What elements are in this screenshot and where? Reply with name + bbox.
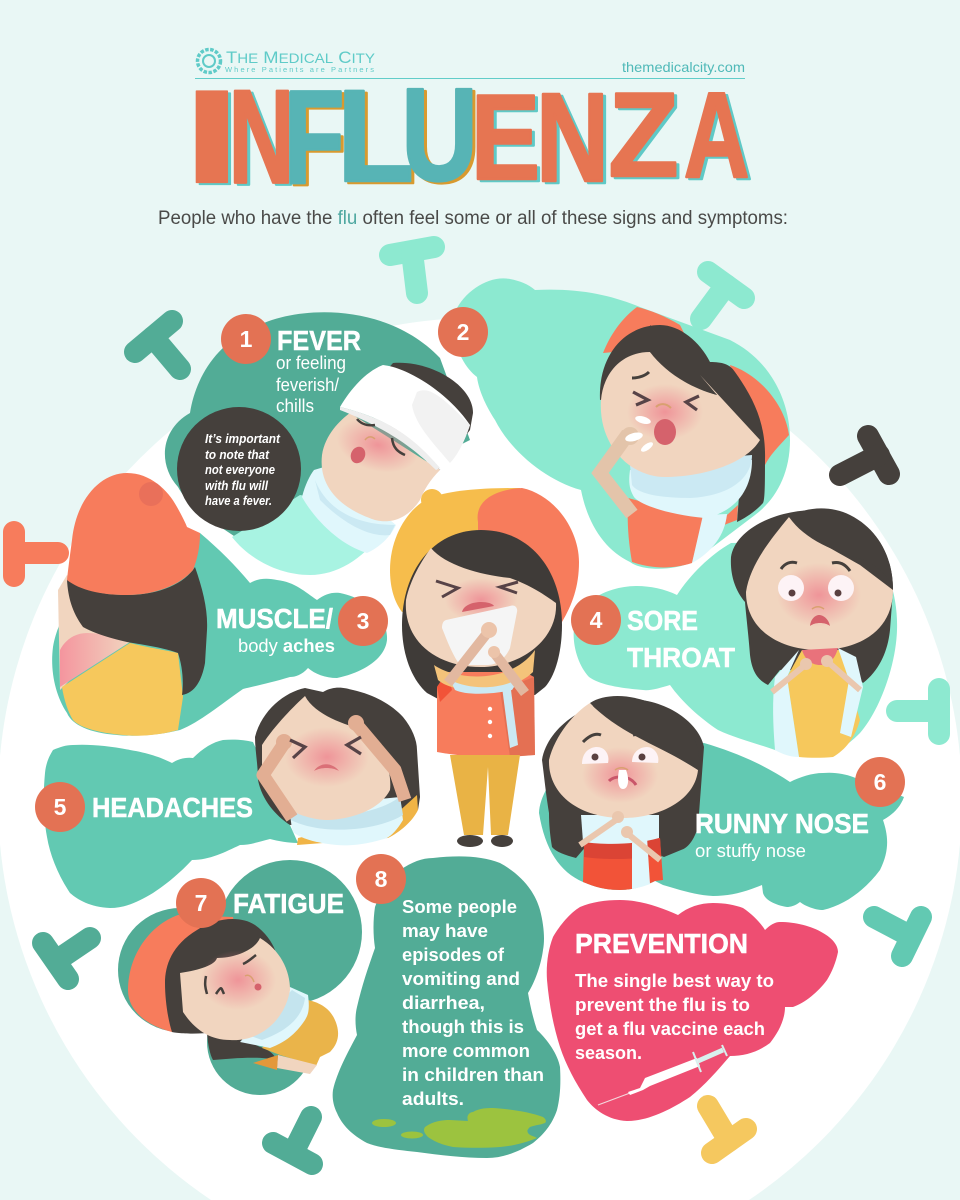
prevention blob (547, 900, 838, 1121)
logo: The Medical City (198, 48, 376, 74)
icon: green T shape upper left (135, 321, 180, 369)
website: themedicalcity.com (622, 59, 745, 75)
fatigue blob (118, 860, 362, 1095)
note circle: have a fever. (205, 494, 272, 508)
arms (448, 632, 525, 693)
subtitle: People who have the flu often feel some or all of these signs and symptoms: (158, 208, 788, 229)
buttons (488, 707, 492, 738)
text: vomiting and diarrhea: may have (402, 921, 488, 941)
text: prevention (575, 971, 774, 1063)
badge 7: 7 (195, 890, 207, 916)
icon: logo ring (198, 50, 220, 72)
title: INFLUENZA: E (471, 69, 540, 206)
badge 1: 1 (240, 326, 253, 352)
fever description: or feeling (276, 353, 346, 373)
panel: runny nose (539, 696, 904, 910)
icon: syringe (598, 1045, 727, 1105)
title: INFLUENZA: N (536, 68, 609, 209)
heading: fatigue: FATIGUE (233, 888, 344, 919)
badge 4: 4 (590, 607, 603, 633)
panel: fever (165, 312, 473, 575)
mouth (462, 602, 494, 612)
heading: headaches: HEADACHES (92, 792, 253, 823)
panel: headaches (44, 688, 420, 908)
badge 5 (35, 782, 85, 832)
icon: green T shape lower left (43, 938, 90, 979)
fever blob (165, 312, 470, 540)
badge 2: 2 (457, 319, 469, 345)
panel: muscle aches (52, 473, 387, 736)
icon: mint T shape upper right (701, 272, 744, 319)
badge 4 (571, 595, 621, 645)
runny nose description: or stuffy nose (695, 841, 806, 861)
mint shirt (232, 495, 390, 575)
text: vomiting and diarrhea: diarrhea, (402, 993, 485, 1013)
hair (402, 530, 562, 700)
tissue (442, 605, 517, 665)
panel: cough (454, 278, 790, 569)
girl from behind (58, 473, 207, 736)
badge 5: 5 (54, 794, 67, 820)
heading: prevention: PREVENTION (575, 928, 748, 959)
badge 7 (176, 878, 226, 928)
badge 3 (338, 596, 388, 646)
text: vomiting and diarrhea: vomiting and (402, 969, 520, 989)
icon: mint T shape top (390, 247, 434, 293)
heading: muscle: MUSCLE/ (216, 603, 333, 634)
text: prevention: prevent the flu is to (575, 995, 750, 1015)
girl coughing (600, 307, 789, 567)
badge 8 (356, 854, 406, 904)
blob 8 (333, 856, 560, 1158)
text: vomiting and diarrhea: episodes of (402, 945, 505, 965)
fever description: feverish/ (276, 375, 339, 395)
badge 2 (438, 307, 488, 357)
girl with runny nose (542, 696, 704, 890)
panel: vomiting and diarrhea (333, 856, 560, 1158)
note circle: to note that (205, 448, 270, 462)
badge 1 (221, 314, 271, 364)
muscle description: body aches (238, 636, 335, 656)
icon: teal T shape lower right (874, 917, 921, 956)
badge 3: 3 (357, 608, 369, 634)
figure: main girl with tissue (390, 488, 579, 847)
hat (390, 488, 579, 622)
text: prevention: season. (575, 1043, 642, 1063)
badge 6 (855, 757, 905, 807)
title: INFLUENZA: U (401, 62, 478, 209)
text: prevention: The single best way to (575, 971, 774, 991)
icon: green T shape bottom (273, 1117, 312, 1164)
note circle: with flu will (205, 479, 268, 493)
runny nose blob (539, 738, 904, 910)
badge 8: 8 (375, 866, 388, 892)
fever description (276, 353, 346, 416)
panel: sore throat (574, 508, 897, 758)
face (406, 548, 556, 667)
heading: sore throat: THROAT (627, 642, 735, 673)
cough blob (454, 278, 790, 569)
title: INFLUENZA: A (684, 67, 749, 203)
heading: sore throat (627, 605, 735, 673)
girl with fever (302, 363, 473, 553)
heading: fever: FEVER (277, 325, 361, 356)
title: INFLUENZA: N (229, 63, 294, 212)
panel: prevention (547, 900, 838, 1121)
note circle (177, 407, 301, 531)
sleeping girl (128, 915, 338, 1074)
icon: orange T shape left (14, 532, 58, 576)
title: INFLUENZA: Z (608, 68, 679, 202)
text: vomiting and diarrhea: though this is (402, 1017, 524, 1037)
badge 6: 6 (874, 769, 886, 795)
panel: fatigue (118, 860, 362, 1095)
title: INFLUENZA: F (284, 63, 344, 211)
text: vomiting and diarrhea: more common (402, 1041, 530, 1061)
sore throat blob (574, 540, 897, 757)
title: INFLUENZA: L (337, 64, 414, 210)
girl with sore throat (731, 508, 893, 758)
text: prevention: get a flu vaccine each (575, 1019, 765, 1039)
icon: yellow T shape bottom (708, 1106, 746, 1153)
fever description: chills (276, 396, 314, 416)
logo: The Medical City: THE MEDICAL CITY (226, 48, 376, 67)
note circle: not everyone (205, 463, 275, 477)
text: vomiting and diarrhea: in children than (402, 1065, 544, 1085)
number badges (35, 307, 905, 928)
logo: The Medical City: Where Patients are Partners (225, 65, 374, 74)
jacket (437, 672, 535, 757)
title: INFLUENZA: I (183, 63, 241, 211)
trousers (450, 755, 520, 835)
text: vomiting and diarrhea: Some people (402, 897, 517, 917)
text: vomiting and diarrhea (402, 897, 544, 1109)
vomit splash (372, 1108, 546, 1148)
shoes (457, 835, 513, 847)
icon: dark T shape right (840, 436, 889, 475)
note circle: It’s important (205, 432, 281, 446)
heading: runny nose: RUNNY NOSE (695, 808, 869, 839)
scarf (434, 650, 535, 690)
text: vomiting and diarrhea: adults. (402, 1089, 464, 1109)
title: INFLUENZA (183, 62, 749, 212)
muscle blob (52, 533, 387, 736)
icon: mint T shape right (897, 689, 939, 734)
headache blob (44, 740, 298, 908)
heading: sore throat: SORE (627, 605, 698, 636)
girl with headache (255, 688, 420, 845)
